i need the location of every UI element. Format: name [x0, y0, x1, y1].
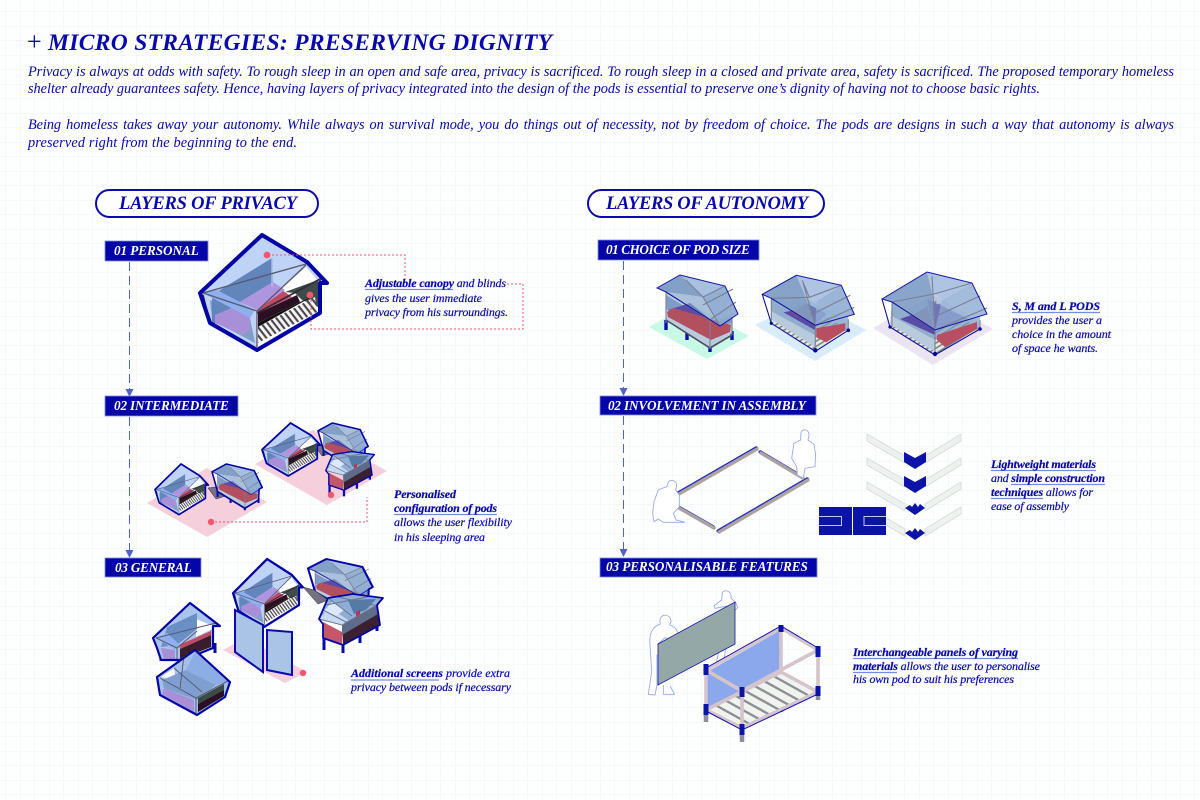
- figure: front person: [648, 615, 678, 695]
- heading: layers of privacy: LAYERS OF PRIVACY: [118, 194, 299, 214]
- callout: interchangeable panels: materials allows the user to personalise: [853, 659, 1041, 673]
- intro paragraph: autonomy: [27, 117, 1174, 151]
- illustration: frame assembly with two people: [653, 430, 816, 532]
- tag: 03 general: [105, 558, 201, 577]
- intro paragraph: autonomy: preserved right from the beginning to the end.: [27, 135, 297, 151]
- arrow: intermediate to general: [126, 417, 134, 558]
- figure: rear person: [714, 591, 738, 662]
- tag: 03 personalisable features: 03 PERSONALISABLE FEATURES: [606, 559, 808, 574]
- callout: personalised configuration: configuration of pods: [394, 501, 497, 515]
- panel: grey screen: [658, 602, 735, 685]
- heading: layers of privacy: [96, 190, 318, 217]
- tag: 03 general: 03 GENERAL: [115, 560, 192, 575]
- callout: S, M and L pods: [1011, 299, 1112, 355]
- title: +: [27, 27, 42, 56]
- arrow: personal to intermediate: [126, 262, 134, 397]
- tag: 01 choice of pod size: 01 CHOICE OF POD SIZE: [606, 242, 750, 257]
- title: MICRO STRATEGIES: PRESERVING DIGNITY: [47, 30, 555, 56]
- heading: layers of autonomy: LAYERS OF AUTONOMY: [605, 194, 810, 214]
- tag: 02 intermediate: 02 INTERMEDIATE: [114, 398, 229, 413]
- illustration: large pod: [873, 272, 993, 365]
- pod: upper left: [153, 603, 220, 661]
- illustration: intermediate pod clusters: [147, 423, 387, 537]
- tag: 01 personal: 01 PERSONAL: [114, 243, 199, 258]
- callout: adjustable canopy: [364, 276, 508, 319]
- callout: personalised configuration: Personalised: [394, 487, 457, 501]
- callout: additional screens: privacy between pods if necessary: [350, 680, 512, 694]
- callout: S, M and L pods: provides the user a: [1011, 313, 1102, 327]
- frame: pod without roof: [706, 625, 818, 742]
- callout: adjustable canopy: gives the user immediate: [365, 291, 483, 305]
- callout: personalised configuration: in his sleeping area: [394, 530, 485, 544]
- callout: S, M and L pods: S, M and L PODS: [1012, 299, 1100, 313]
- callout: interchangeable panels: his own pod to suit his preferences: [853, 672, 1014, 686]
- callout: additional screens: [350, 666, 512, 694]
- intro paragraph: autonomy: Being homeless takes away your autonomy. While always on survival mode, you do things out of necessity, not by freedom of choice. The pods are designs in such a way that autonomy is always: [28, 117, 1174, 133]
- illustration: medium pod: [755, 275, 866, 361]
- callout: lightweight materials: and simple construction: [991, 471, 1105, 485]
- intro paragraph: privacy: [27, 64, 1174, 97]
- tag: 02 involvement in assembly: 02 INVOLVEMENT IN ASSEMBLY: [608, 398, 808, 413]
- callout: personalised configuration: [394, 487, 513, 544]
- pod: lower left: [157, 650, 230, 715]
- callout: additional screens: Additional screens provide extra: [350, 666, 510, 680]
- callout: interchangeable panels: [852, 645, 1041, 686]
- illustration: construction joints: [819, 434, 961, 540]
- tag: 01 choice of pod size: [598, 240, 759, 260]
- callout: interchangeable panels: Interchangeable panels of varying: [852, 645, 1018, 659]
- illustration: personal pod with canopy: [200, 235, 523, 350]
- callout: S, M and L pods: of space he wants.: [1012, 341, 1098, 355]
- figure: kneeling person: [653, 480, 685, 522]
- figure: standing person: [792, 430, 816, 478]
- callout: lightweight materials: ease of assembly: [991, 499, 1070, 513]
- callout: lightweight materials: Lightweight materials: [990, 457, 1096, 471]
- callout: S, M and L pods: choice in the amount: [1012, 327, 1112, 341]
- tag: 01 personal: [105, 241, 208, 261]
- heading: layers of autonomy: [588, 190, 824, 217]
- arrow: pod size to assembly: [620, 261, 628, 396]
- tag: 02 intermediate: [105, 396, 238, 416]
- callout: personalised configuration: allows the user flexibility: [394, 515, 513, 529]
- illustration: small pod: [649, 275, 749, 359]
- illustration: general pods with screens: [153, 559, 383, 715]
- arrow: assembly to features: [620, 416, 628, 557]
- callout: lightweight materials: techniques allows for: [991, 485, 1093, 499]
- callout: adjustable canopy: privacy from his surroundings.: [364, 305, 508, 319]
- illustration: interchangeable panel and frame: [648, 591, 818, 742]
- intro paragraph: privacy: Privacy is always at odds with safety. To rough sleep in an open and safe area, privacy is sacrificed. To rough sleep in a closed and private area, safety is sacrificed. The proposed temporary homeless: [27, 64, 1174, 80]
- callout: lightweight materials: [990, 457, 1105, 513]
- intro paragraph: privacy: shelter already guarantees safety. Hence, having layers of privacy integrated into the design of the pods is essential to preserve one’s dignity of having not to choose basic rights.: [28, 81, 1040, 97]
- callout: adjustable canopy: Adjustable canopy and blinds: [364, 276, 506, 290]
